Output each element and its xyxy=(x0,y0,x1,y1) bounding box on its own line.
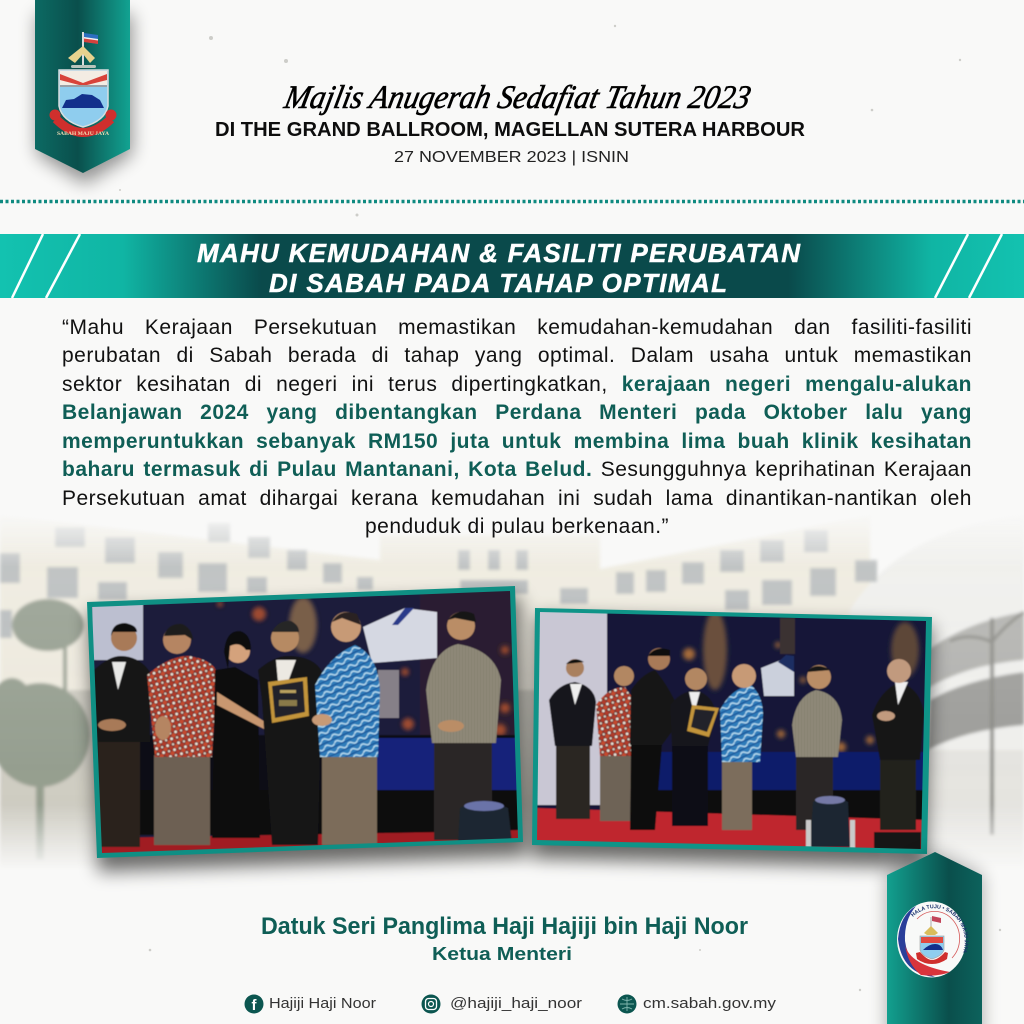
person 4 xyxy=(670,668,716,826)
headline text: MAHU KEMUDAHAN & FASILITI PERUBATAN xyxy=(197,238,801,268)
quote text block: perubatan di Sabah berada di tahap yang optimal. Dalam usaha untuk memastikan xyxy=(62,344,972,367)
award plaque xyxy=(687,705,719,737)
social: website: cm.sabah.gov.my xyxy=(643,995,777,1012)
person 3 xyxy=(629,647,674,830)
award plaque xyxy=(268,677,309,723)
person 3 xyxy=(212,631,270,838)
venue heading: DI THE GRAND BALLROOM, MAGELLAN SUTERA HARBOUR xyxy=(215,118,805,141)
quote text block: memperuntukkan sebanyak RM150 juta untuk membina lima buah klinik kesihatan xyxy=(62,430,972,453)
person 6 xyxy=(792,665,842,830)
quote text block xyxy=(62,316,972,538)
bottom-right ribbon with emblem xyxy=(876,844,993,1024)
speaker box xyxy=(874,832,921,850)
social: facebook: Hajiji Haji Noor xyxy=(269,995,376,1012)
person 5 xyxy=(720,664,763,830)
person 4 xyxy=(258,621,322,845)
quote text block: “Mahu Kerajaan Persekutuan memastikan kemudahan-kemudahan dan fasiliti-fasiliti xyxy=(62,316,972,339)
quote text block: penduduk di pulau berkenaan.” xyxy=(365,515,669,538)
person 2 xyxy=(147,624,217,845)
person 1 xyxy=(549,659,596,819)
icon: state crest: SABAH MAJU JAYA xyxy=(57,131,109,137)
top-left ribbon with Sabah crest xyxy=(35,0,132,184)
photo left: award presentation xyxy=(85,585,525,860)
social: website xyxy=(618,994,777,1014)
icon: state crest xyxy=(50,32,116,137)
quote text block: baharu termasuk di Pulau Mantanani, Kota Belud. Sesungguhnya keprihatinan Kerajaan xyxy=(62,458,972,481)
social: instagram xyxy=(422,994,582,1014)
quote text block: sektor kesihatan di negeri ini terus dipertingkatkan, kerajaan negeri mengalu-alukan xyxy=(62,373,972,396)
social: facebook: f xyxy=(252,997,258,1014)
quote text block: Belanjawan 2024 yang dibentangkan Perdana Menteri pada Oktober lalu yang xyxy=(62,401,972,424)
headline text: DI SABAH PADA TAHAP OPTIMAL xyxy=(269,268,727,298)
background photo: building xyxy=(0,515,1024,880)
person 2 xyxy=(596,666,634,821)
title: Majlis Anugerah Sedafiat Tahun 2023 xyxy=(280,79,754,116)
photo right: award presentation xyxy=(530,605,935,855)
stage light xyxy=(458,801,512,842)
headline banner xyxy=(0,234,1024,298)
signatory name: Datuk Seri Panglima Haji Hajiji bin Haji Noor xyxy=(261,913,748,940)
signatory title: Ketua Menteri xyxy=(432,943,572,964)
photo shadows xyxy=(88,596,932,872)
person 7 xyxy=(872,659,924,830)
icon: Hala Tuju emblem xyxy=(897,902,968,978)
social: instagram: @hajiji_haji_noor xyxy=(450,995,582,1012)
person 1 xyxy=(94,623,150,847)
headline text xyxy=(197,238,801,298)
stage light xyxy=(806,796,855,848)
person 6 xyxy=(426,612,501,840)
person 5 xyxy=(312,612,380,845)
icon: Hala Tuju emblem: HALA TUJU • SABAH MAJU JAYA xyxy=(910,904,968,952)
quote text block: Persekutuan amat dihargai kerana kemudahan ini sudah lama dinantikan-nantikan oleh xyxy=(62,487,972,510)
date: 27 NOVEMBER 2023 | ISNIN xyxy=(394,149,629,166)
social: facebook xyxy=(244,994,376,1014)
